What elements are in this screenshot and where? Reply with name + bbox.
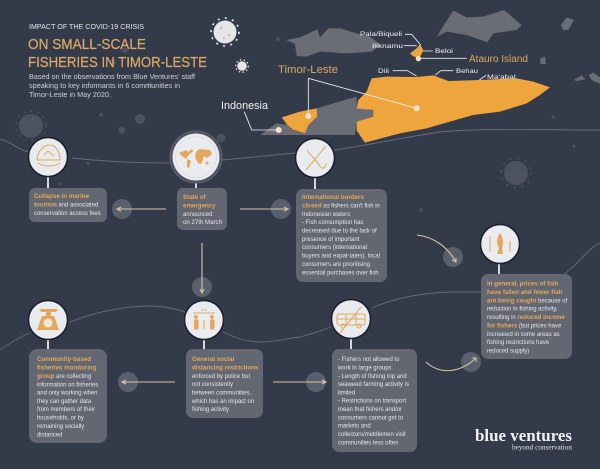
panel: state of emergency: on 27th March <box>183 220 222 226</box>
panel: social distancing: distancing restrictions <box>192 364 259 372</box>
panel: community-based monitoring: and only working when <box>37 390 97 396</box>
panel: transport restrictions: collectors/middlemen visit <box>338 432 406 438</box>
intro text <box>29 74 195 99</box>
title: fisheries in Timor-Leste: FISHERIES IN TIMOR-LESTE <box>28 54 207 71</box>
panel: transport restrictions: limited <box>338 390 355 396</box>
intro text: speaking to key informants in 6 communities in <box>29 83 180 90</box>
panel: international borders closed: buyers and expat-tates), local <box>302 254 380 260</box>
panel: collapse in marine tourism: Collapse in marine <box>34 193 90 200</box>
map: Atauro island <box>410 44 423 57</box>
icon: hands and dish <box>28 138 68 176</box>
panel: state of emergency: emergency <box>183 202 216 210</box>
arrows with discs <box>112 199 481 392</box>
panel: fish prices: are being caught because of <box>487 298 568 304</box>
panel: social distancing: enforced by police but <box>192 374 250 380</box>
map label: Atauro Island: Atauro Island <box>469 54 528 65</box>
panel: fish prices: fishing restrictions have <box>487 340 550 346</box>
panel: international borders closed: closed so fishers can't fish in <box>302 202 380 210</box>
map labels: communities: Ma'abat <box>487 74 516 81</box>
decorative virus particles <box>16 37 576 212</box>
map label: Indonesia: Indonesia <box>221 100 269 112</box>
intro text: Based on the observations from Blue Ventures’ staff <box>29 74 195 81</box>
panel: fish prices: In general, prices of fish <box>487 280 558 288</box>
panel: transport restrictions: consumers cannot get to <box>338 416 404 422</box>
panel: fish prices: have fallen and fewer fish <box>487 289 563 296</box>
panel: community-based monitoring <box>28 300 107 443</box>
icon: fish hook crossed <box>296 138 334 178</box>
panel: international borders closed: consumers (international <box>302 245 367 251</box>
map labels: communities: Iliknamu <box>372 43 404 50</box>
panel: transport restrictions: seaweed farming activity is <box>338 382 409 388</box>
panel: transport restrictions: work in large groups <box>337 366 391 372</box>
panel: collapse in marine tourism <box>28 138 107 222</box>
panel: community-based monitoring: group are collecting <box>37 373 91 380</box>
panel: international borders closed <box>296 138 387 282</box>
panel: international borders closed: Indonesian waters <box>302 212 350 218</box>
panel: fish prices <box>480 224 572 359</box>
logo: blue ventures: blue ventures <box>475 426 572 445</box>
map: leader lines <box>244 34 486 130</box>
title: on small-scale: ON SMALL-SCALE <box>28 36 146 53</box>
panel: social distancing: fishing activity <box>192 407 229 413</box>
panel: fish prices: reduction in fishing activity, <box>487 306 558 312</box>
panel: state of emergency <box>170 131 227 230</box>
panel: social distancing: not consistently <box>192 382 233 388</box>
panel: international borders closed: consumers are prioritising <box>302 262 370 268</box>
panel: community-based monitoring: from members of their <box>37 407 95 413</box>
panel: state of emergency: State of <box>183 194 207 201</box>
panel: international borders closed: essential purchases over fish <box>302 270 379 276</box>
icon: weighing scale <box>28 300 68 340</box>
map: neighbouring islands <box>260 10 600 135</box>
map labels: communities: Dili <box>378 68 389 75</box>
panel: international borders closed: - Fish consumption has <box>302 220 363 226</box>
wavy timeline lines <box>0 130 600 350</box>
intro text: Timor-Leste in May 2020. <box>29 92 111 99</box>
map labels: communities: Behau <box>456 68 479 75</box>
panel: international borders closed: decreased due to the lack of <box>302 228 377 234</box>
panel: international borders closed: International borders <box>302 194 364 201</box>
map: Oecusse <box>282 108 317 133</box>
panel: community-based monitoring: they can gather data <box>37 399 92 405</box>
panel: fish prices: resulting in reduced income <box>487 314 565 321</box>
icon: small white virus <box>236 60 248 72</box>
panel: collapse in marine tourism: tourism and associated <box>34 202 98 208</box>
panel: transport restrictions: markets and <box>338 424 371 430</box>
panel: state of emergency: announced <box>183 212 212 218</box>
map <box>244 10 600 143</box>
map label: Timor-Leste: Timor-Leste <box>278 64 338 76</box>
panel: community-based monitoring: information on fisheries <box>37 382 98 388</box>
panel: community-based monitoring: distanced <box>37 432 62 438</box>
panel: transport restrictions: - Length of fishing trip and <box>338 374 407 380</box>
icon: people one metre apart: 1m <box>201 307 207 312</box>
panel: social distancing: which has an impact on <box>191 399 254 405</box>
panel: international borders closed: presence of important <box>302 237 360 243</box>
panel: community-based monitoring: households, or by <box>37 416 84 422</box>
icon: large white virus <box>211 18 239 46</box>
heading: impact: IMPACT OF THE COVID-19 CRISIS <box>29 22 144 31</box>
panel: social distancing: between communities, <box>192 390 251 396</box>
map: location dots <box>276 56 421 133</box>
logo: blue ventures: beyond conservation <box>512 444 573 452</box>
panel: community-based monitoring: Community-based <box>37 356 91 363</box>
icon: crossed out bus <box>332 300 370 338</box>
panel: community-based monitoring: remaining socially <box>37 424 84 430</box>
panel: social distancing: General social <box>192 356 235 363</box>
panel: social distancing <box>184 300 263 418</box>
panel: fish prices: for fishers (but prices have <box>487 322 562 330</box>
panel: fish prices: increased in some areas as <box>487 332 560 338</box>
panel: fish prices: reduced supply) <box>487 348 529 354</box>
panel: transport restrictions <box>332 300 417 452</box>
map: Timor-Leste mainland <box>357 75 550 143</box>
map labels: communities <box>360 31 516 81</box>
icon: world map <box>170 131 222 183</box>
panel: collapse in marine tourism: conservation access fees <box>34 211 101 217</box>
panel: transport restrictions: communities less often <box>338 440 398 446</box>
icon: fish <box>480 224 520 264</box>
panel: transport restrictions: - Restrictions on transport <box>338 398 406 404</box>
map labels: communities: Pala/Biqueli <box>360 31 402 38</box>
panel: community-based monitoring: fisheries monitoring <box>37 364 97 372</box>
panel: transport restrictions: - Fishers not allowed to <box>338 357 400 363</box>
map labels: communities: Beloi <box>435 48 453 55</box>
panel: transport restrictions: mean that fishers and/or <box>338 407 402 413</box>
